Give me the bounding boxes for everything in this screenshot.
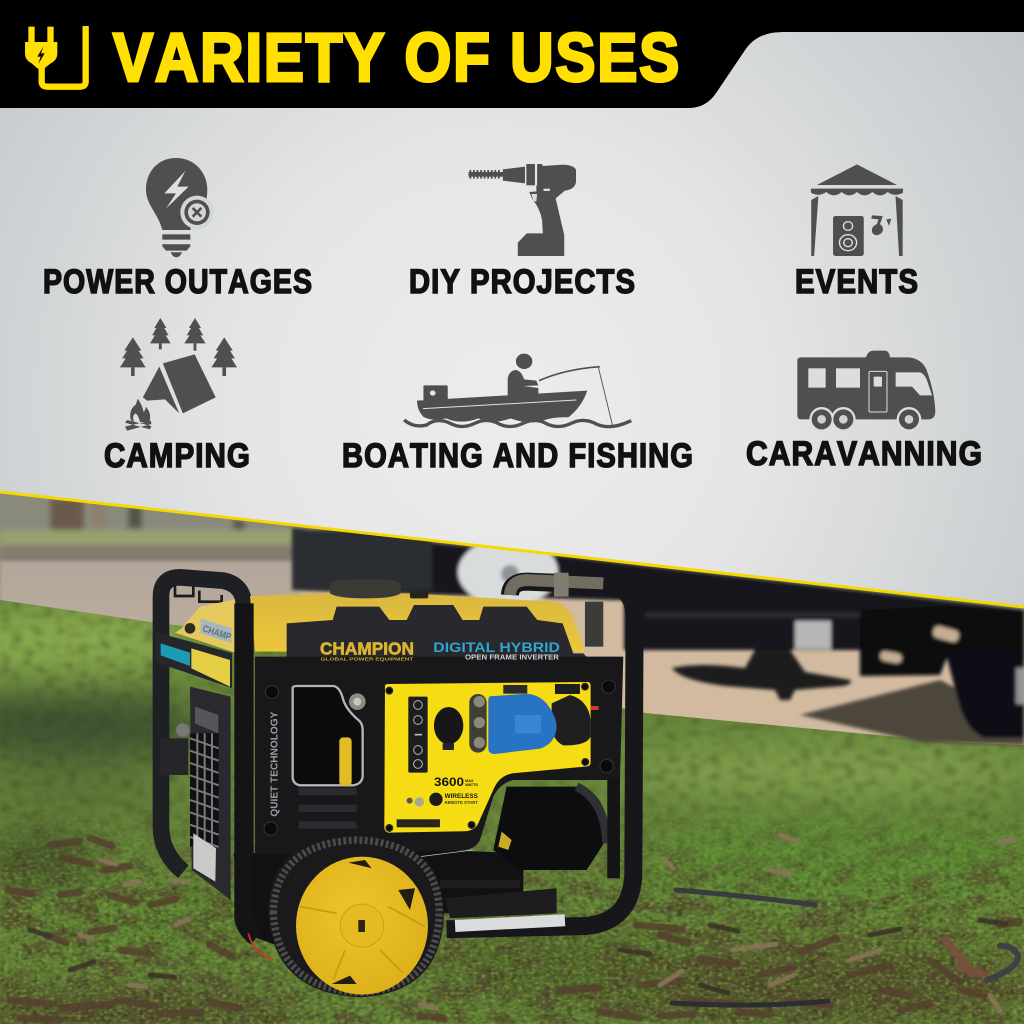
front left frame post [244, 603, 257, 937]
panel bolts [264, 680, 615, 835]
icon: cordless drill [469, 164, 576, 256]
distant trees [0, 490, 300, 563]
label: camping: CAMPING [104, 437, 251, 475]
yellow fuel tank [250, 593, 585, 652]
brand labels: OPEN FRAME INVERTER [465, 652, 559, 661]
back left frame tube [161, 577, 244, 872]
red wire [248, 933, 273, 960]
grass light and shadow areas [0, 600, 1024, 1024]
brand labels: GLOBAL POWER EQUIPMENT [321, 657, 413, 663]
quiet technology label: QUIET TECHNOLOGY [269, 711, 280, 817]
engine underside [493, 787, 608, 870]
trailer [292, 528, 1024, 745]
yellow control panel: 3600 [434, 775, 464, 789]
label: caravanning: CARAVANNING [746, 435, 983, 473]
yellow control panel: MAX [465, 779, 474, 783]
yellow control panel: REMOTE START [445, 800, 478, 806]
brand labels: CHAMPION [320, 639, 414, 659]
generator [155, 573, 635, 997]
gravel road [0, 561, 1024, 750]
icon: motorhome [797, 351, 935, 432]
brand labels [320, 639, 560, 663]
grass field [0, 600, 1024, 1024]
yellow control panel: WATTS [465, 783, 478, 787]
header bar: black banner [0, 0, 1024, 108]
hoses on the grass [672, 890, 1018, 1005]
yellow control panel [384, 682, 599, 833]
yellow diagonal accent line [0, 492, 1024, 607]
main black body [255, 657, 623, 855]
label: diy projects: DIY PROJECTS [409, 263, 636, 301]
icon: light bulb power outage [146, 158, 214, 257]
icon: boat with fisherman [404, 354, 631, 427]
panel: grey uses panel [0, 32, 1024, 607]
side panel with vent [190, 687, 231, 900]
fuel cap [330, 579, 401, 598]
yellow control panel: WIRELESS [445, 793, 478, 800]
front right frame tube [447, 582, 635, 929]
icon: event tent with speaker [811, 164, 903, 256]
hitch shadow [672, 650, 851, 700]
frame latches [175, 585, 222, 602]
wheel [268, 835, 444, 997]
generator: CHAMP [201, 624, 233, 643]
black top shroud [287, 605, 590, 660]
fallen leaves [8, 835, 1020, 1020]
icon: plug and cord [25, 26, 86, 87]
brand labels: DIGITAL HYBRID [433, 639, 560, 655]
pull start recess [293, 686, 366, 786]
label: events: EVENTS [795, 263, 919, 301]
title: VARIETY OF USES [113, 19, 681, 96]
left side band [155, 632, 232, 688]
under-body dark fill [233, 850, 523, 947]
icon: tent, trees and campfire [120, 318, 237, 431]
label: boating and fishing: BOATING AND FISHING [342, 437, 694, 475]
background photo: yard with trailer [0, 480, 1024, 1024]
label: power outages: POWER OUTAGES [43, 263, 313, 301]
